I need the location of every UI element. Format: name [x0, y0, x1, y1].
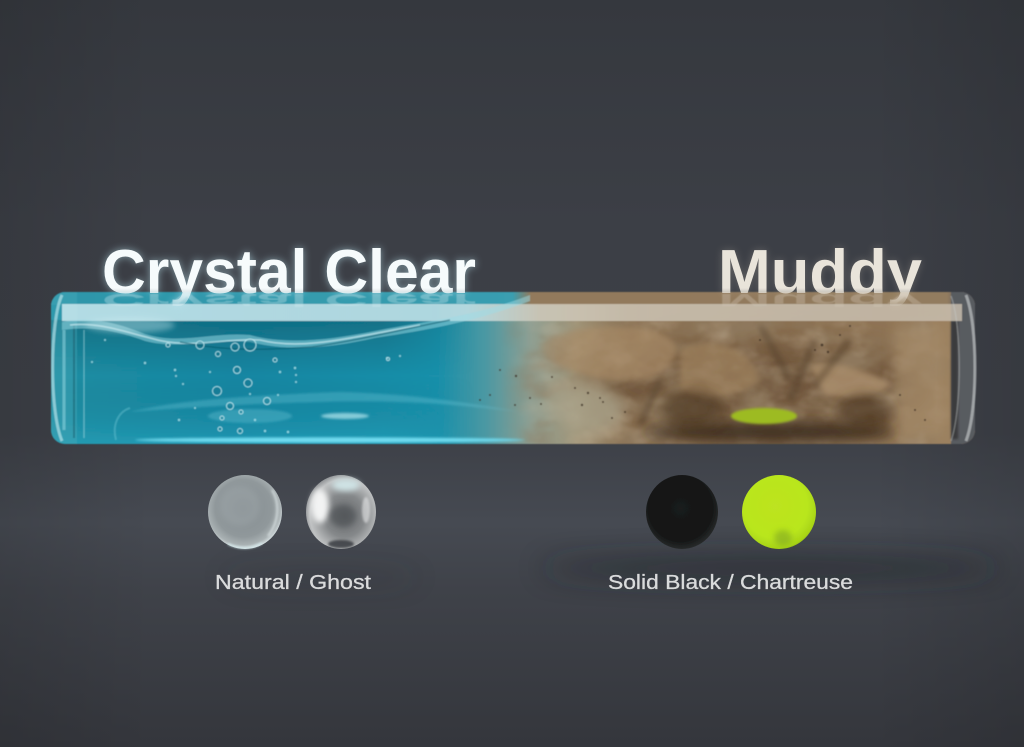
title: Crystal Clear: Crystal Clear — [102, 238, 476, 307]
glass tube — [50, 290, 980, 446]
bubbles — [166, 339, 390, 434]
sphere: natural clear — [208, 475, 282, 549]
swatch group: natural and ghost — [208, 475, 376, 594]
sphere: chartreuse — [742, 475, 816, 549]
reflections of title words on the tube surface: Muddy — [718, 290, 923, 310]
title: Crystal Clear: Crystal Clear — [102, 238, 476, 307]
reflections of title words on the tube surface: Crystal Clear — [102, 290, 476, 310]
right glass end — [951, 292, 977, 444]
chartreuse lure seen through mud — [731, 408, 797, 424]
white glass highlight band — [62, 304, 962, 321]
sphere: solid black — [646, 475, 718, 549]
title: Muddy: Muddy — [718, 238, 923, 307]
tube outline — [53, 295, 975, 441]
swatch group: solid black and chartreuse — [608, 475, 853, 594]
title: Muddy: Muddy — [718, 238, 923, 307]
liquid: water to mud — [50, 290, 980, 446]
left glass end — [51, 292, 84, 444]
mud clouds — [490, 321, 970, 444]
sphere: ghost silver — [306, 475, 376, 549]
clear water highlights — [115, 392, 525, 443]
wave surface — [62, 295, 530, 349]
grit specks — [479, 325, 926, 421]
label: natural / ghost: Natural / Ghost — [215, 572, 371, 594]
reflections of title words on the tube surface — [104, 294, 921, 306]
label: solid black / chartreuse: Solid Black / Chartreuse — [608, 572, 853, 594]
